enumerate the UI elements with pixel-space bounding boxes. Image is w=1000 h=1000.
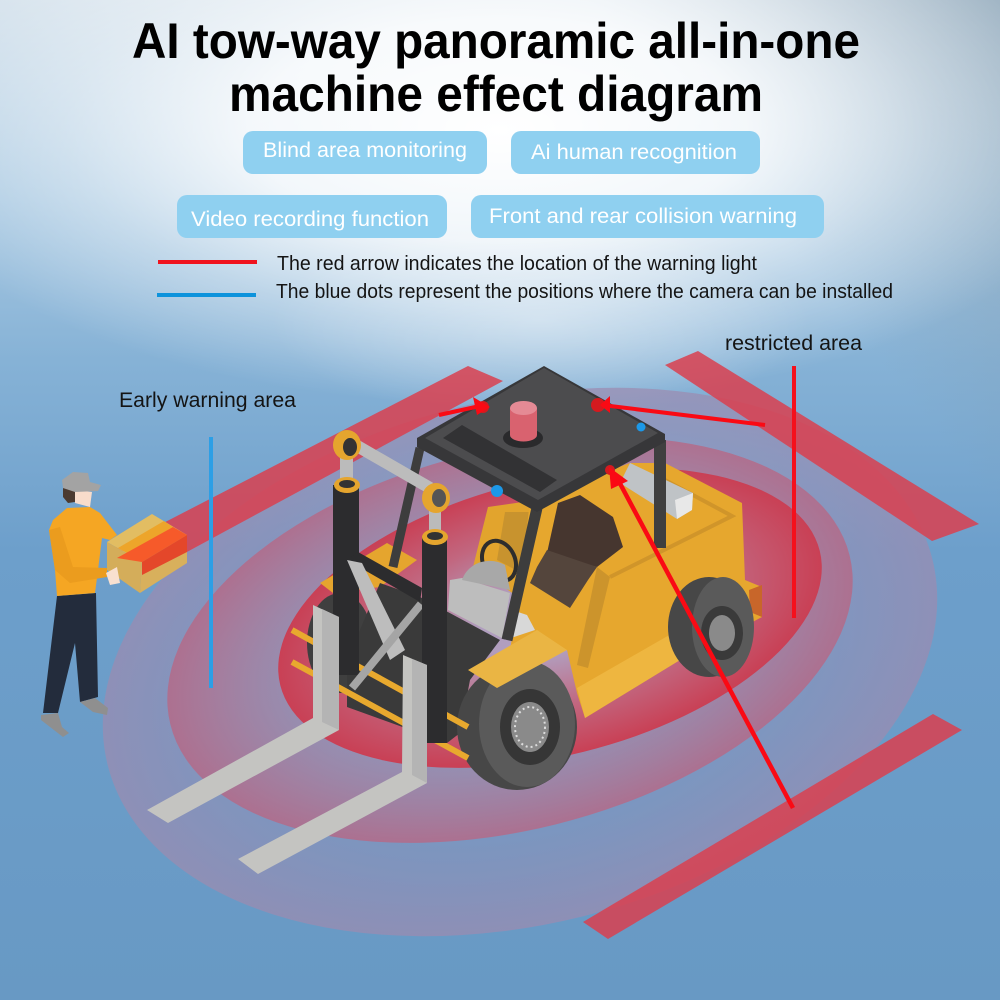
legs [43,593,98,713]
mast left [333,485,359,675]
warning zone rings [44,305,996,1000]
feature badge: video recording: Video recording function [191,208,429,231]
person with box [41,472,187,737]
box [107,514,187,562]
forklift [147,366,762,874]
front post center [507,508,537,640]
cylinder caps [334,477,360,493]
dash panel [448,578,510,638]
cab interior [473,500,540,600]
camera position dots [491,422,646,497]
feature badge: blind area monitoring: Blind area monitoring [263,139,467,162]
front post left [393,448,420,567]
steering wheel [476,535,522,587]
X brace [347,560,405,660]
mudguard [468,630,567,688]
engine box [620,463,693,519]
jacket [49,507,117,596]
arm [49,527,107,583]
cross rod [352,443,430,488]
title [132,13,860,122]
feature badge: collision warning [471,195,824,238]
red arrows [439,396,793,808]
legend: The red arrow indicates the location of the warning light [277,252,757,275]
lift rods [340,450,353,484]
carriage bars [292,630,468,758]
rear post [654,440,666,548]
cap [62,472,101,492]
rear wheel [668,577,750,677]
warning beacon [503,428,543,448]
hair [63,488,75,503]
restricted area floor stripes [107,351,979,939]
roof [417,366,665,512]
seat base [530,550,597,608]
forks [147,605,339,823]
mast right [422,537,447,743]
steering dome [462,561,510,590]
arrow: right roof [591,396,765,425]
side skirt [577,630,680,718]
feature badge: blind area monitoring [243,131,487,174]
face [75,490,92,507]
front wheel [457,664,577,790]
side panel [577,567,610,668]
restricted marker line [792,366,796,618]
body [510,463,762,718]
rear deck trim [610,480,732,577]
joints [333,430,361,460]
title: machine effect diagram [229,66,763,122]
black front frame [347,583,500,743]
arrow: left roof [439,397,490,415]
hand [106,567,120,585]
shoes [41,713,69,737]
label: restricted area: restricted area [725,332,862,355]
rear left fender [320,543,417,593]
feature badge: video recording [177,195,447,238]
early warning marker line [209,437,213,688]
rear bumper stripes [749,585,762,617]
legend [157,252,893,303]
seat back [547,495,623,567]
feature badge: human recognition: Ai human recognition [531,141,737,164]
far front wheel [307,593,373,693]
cross bar [347,552,422,602]
title: AI tow-way panoramic all-in-one [132,13,860,69]
feature badge: human recognition [511,131,760,174]
label: early warning area: Early warning area [119,389,296,412]
arrow: front roof [605,465,793,808]
feature badge: collision warning: Front and rear collision warning [489,205,797,228]
legend: The blue dots represent the positions where the camera can be installed [276,280,893,303]
